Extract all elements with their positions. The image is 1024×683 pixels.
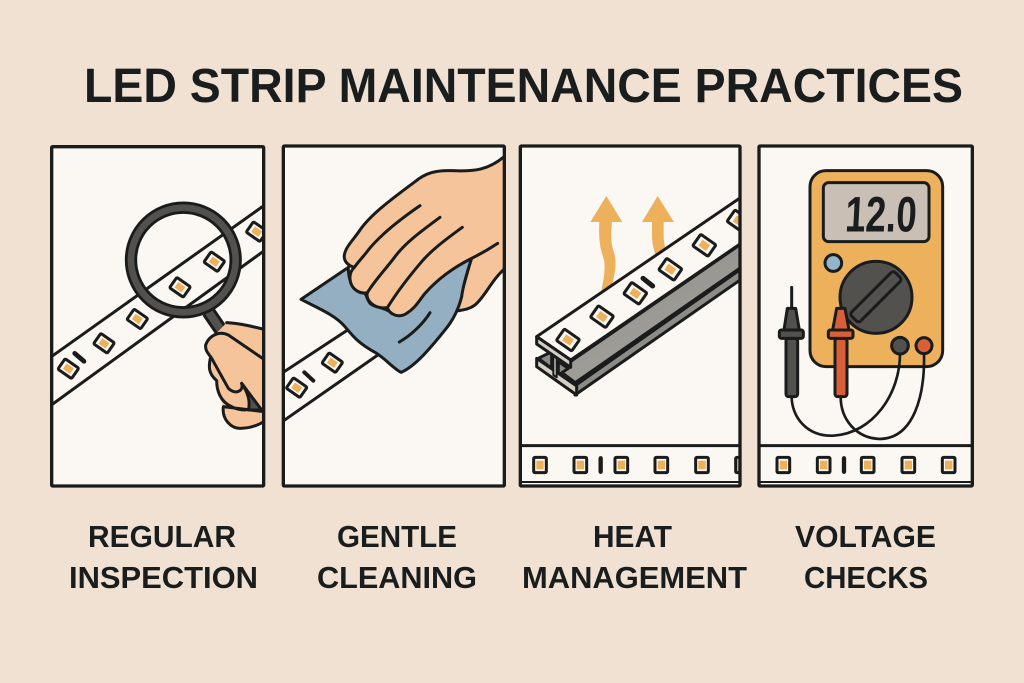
label: voltage checks: VOLTAGE [795,519,936,554]
label: heat management: MANAGEMENT [522,560,747,595]
panel: heat management [520,146,750,486]
panel: voltage checks [759,146,972,486]
label: heat management [522,519,747,595]
LED strip [51,206,267,405]
aluminium channel with LED strip [537,197,750,395]
multimeter display [823,183,929,242]
label: regular inspection: INSPECTION [69,560,258,595]
title: LED STRIP MAINTENANCE PRACTICES [84,60,963,113]
label: voltage checks: CHECKS [804,560,928,595]
bottom LED strip [521,446,748,482]
panel: regular inspection [51,147,267,486]
reading: 12.0 [844,187,918,243]
icon: hand wiping with cloth [301,156,505,372]
icon: hand holding magnifying glass [131,208,264,428]
panel: gentle cleaning [283,146,505,486]
label: gentle cleaning [317,519,477,595]
test leads [779,287,924,439]
label: gentle cleaning: GENTLE [337,519,457,554]
label: gentle cleaning: CLEANING [317,560,477,595]
LED strip [284,331,378,421]
label: voltage checks [795,519,936,595]
label: heat management: HEAT [593,519,672,554]
bottom LED strip [759,446,972,482]
icon: heat arrows [590,196,674,291]
label: regular inspection [69,519,258,595]
label: regular inspection: REGULAR [88,519,236,554]
icon: multimeter [810,171,943,367]
